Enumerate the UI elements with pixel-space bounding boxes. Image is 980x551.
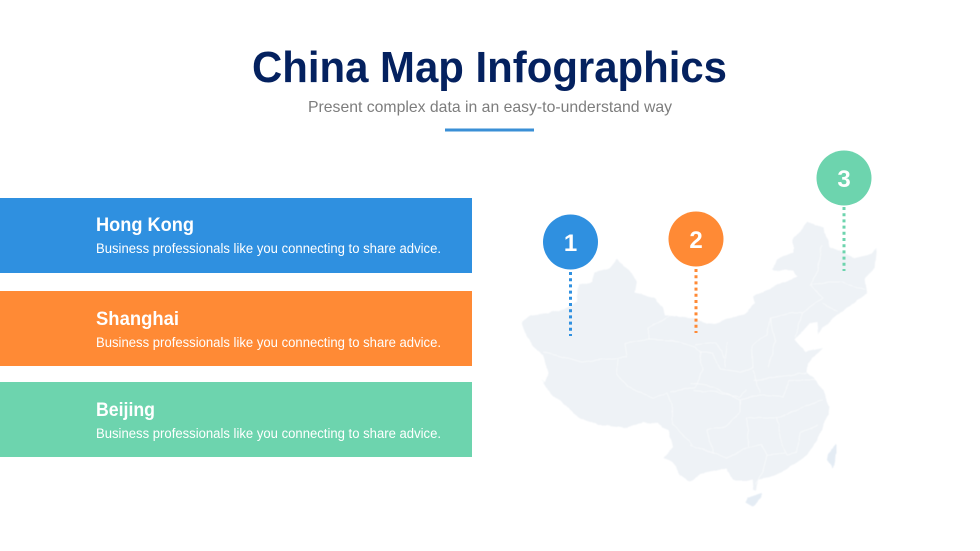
title: China Map Infographics: [252, 43, 727, 92]
icon: Taiwan: [827, 444, 836, 468]
pin 3: 3: [837, 166, 851, 193]
panel: Beijing: [0, 382, 472, 457]
heading: Beijing: Beijing: [96, 400, 155, 421]
text: Beijing description: Business professionals like you connecting to share advice.: [96, 426, 441, 441]
title underline: [445, 128, 534, 132]
panel: Hong Kong: [0, 198, 472, 273]
pin 2: 2: [689, 227, 703, 254]
map: China: [522, 222, 877, 507]
subtitle: Present complex data in an easy-to-understand way: [308, 99, 672, 116]
panel: Shanghai: [0, 291, 472, 366]
pin 2: [668, 212, 724, 333]
pin 3: [816, 150, 872, 271]
heading: Hong Kong: Hong Kong: [96, 215, 194, 236]
text: Hong Kong description: Business professionals like you connecting to share advice.: [96, 241, 441, 256]
pin 1: [543, 214, 598, 336]
pin 1: 1: [564, 230, 577, 257]
province borders: [543, 245, 865, 485]
icon: Leizhou peninsula: [752, 478, 758, 490]
heading: Shanghai: Shanghai: [96, 309, 179, 330]
text: Shanghai description: Business professionals like you connecting to share advice.: [96, 335, 441, 350]
icon: Hainan: [746, 493, 762, 507]
